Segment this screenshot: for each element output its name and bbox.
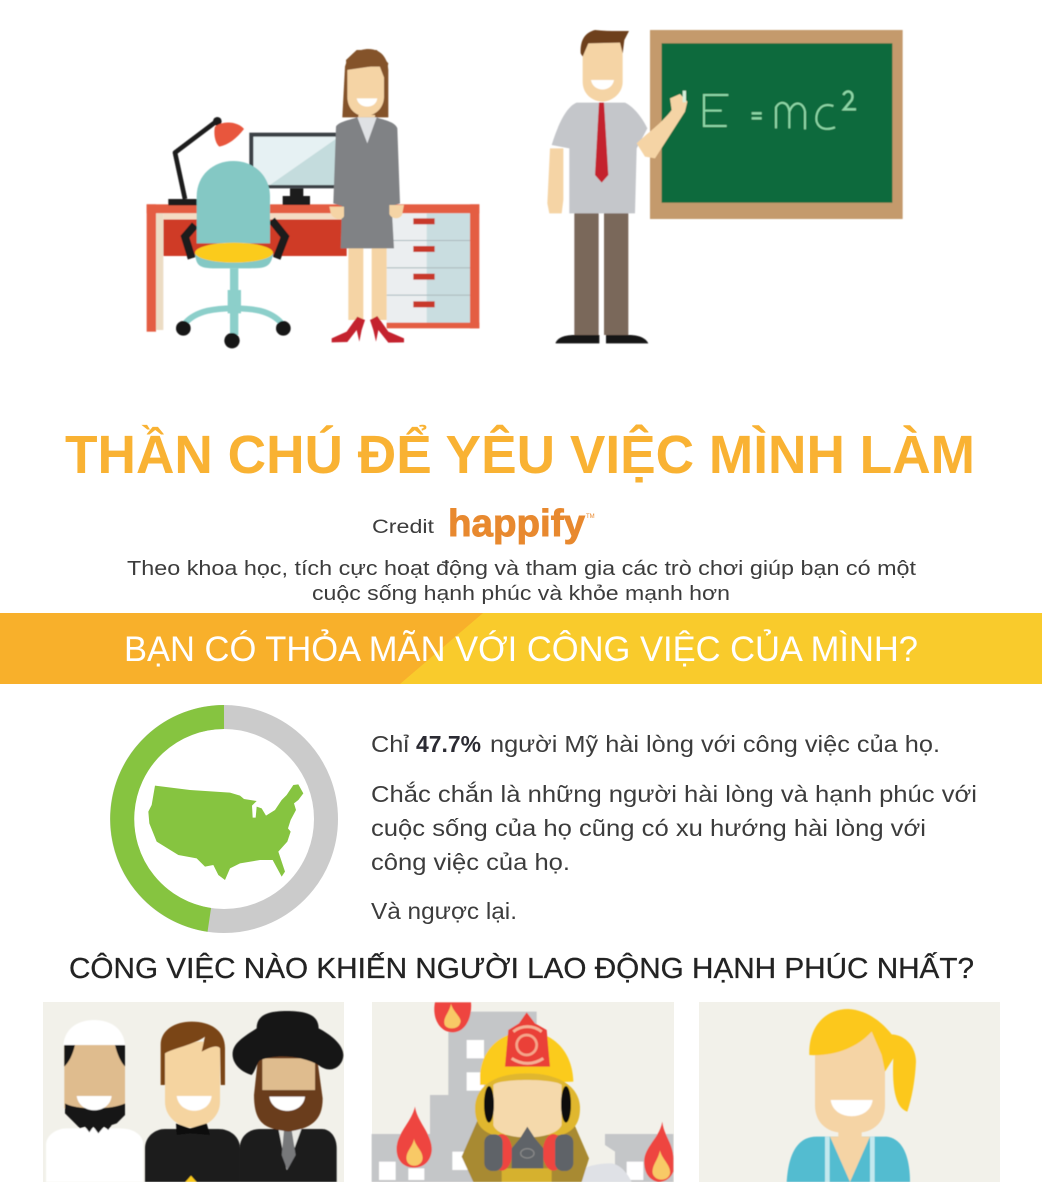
helmet badge <box>505 1012 550 1067</box>
icon: US map <box>148 784 303 880</box>
logo: happify: TM <box>586 514 595 520</box>
text block: satisfaction statistics: 47.7% <box>416 731 481 757</box>
nurse hair <box>809 1009 916 1112</box>
text block: satisfaction statistics: cuộc sống của họ cũng có xu hướng hài lòng với <box>371 815 926 841</box>
banner heading: BẠN CÓ THỎA MÃN VỚI CÔNG VIỆC CỦA MÌNH? <box>124 629 918 669</box>
desk lamp <box>168 117 244 205</box>
firefighter <box>462 1012 632 1182</box>
credit line: Credit <box>372 517 435 538</box>
gas mask <box>484 1127 573 1171</box>
banner <box>0 613 1042 684</box>
nurse body <box>787 1137 910 1182</box>
priest <box>145 1022 240 1182</box>
section heading: CÔNG VIỆC NÀO KHIẾN NGƯỜI LAO ĐỘNG HẠNH PHÚC NHẤT? <box>69 951 974 985</box>
formula <box>704 91 856 129</box>
donut chart: 47.7% with US map <box>122 717 326 921</box>
panel: nurse <box>699 1002 1000 1182</box>
burning buildings <box>430 1012 537 1182</box>
teacher <box>547 30 687 343</box>
office chair <box>176 161 291 348</box>
text block: satisfaction statistics: Và ngược lại. <box>371 898 517 924</box>
imam <box>46 1020 143 1182</box>
intro text <box>127 558 917 605</box>
text block: satisfaction statistics: Chắc chắn là những người hài lòng và hạnh phúc với <box>371 781 977 807</box>
computer monitor <box>249 133 339 205</box>
intro text: Theo khoa học, tích cực hoạt động và tham gia các trò chơi giúp bạn có một <box>127 558 917 580</box>
text block: satisfaction statistics: người Mỹ hài lòng với công việc của họ. <box>490 731 940 757</box>
flames <box>397 1002 673 1182</box>
text block: satisfaction statistics <box>371 731 977 924</box>
nurse head <box>815 1028 885 1142</box>
logo: happify: happify <box>448 503 585 545</box>
panel: firefighter <box>372 1002 674 1182</box>
text block: satisfaction statistics: công việc của họ. <box>371 849 570 875</box>
title: THẦN CHÚ ĐỂ YÊU VIỆC MÌNH LÀM <box>65 424 975 485</box>
desk <box>147 204 479 332</box>
illustration: office desk and woman <box>147 49 479 348</box>
woman <box>329 49 404 343</box>
text block: satisfaction statistics: Chỉ <box>371 731 409 757</box>
credit line <box>372 503 595 545</box>
nurse smile <box>831 1100 873 1116</box>
rabbi <box>233 1011 343 1182</box>
illustration: teacher and blackboard <box>547 30 903 343</box>
panel: clergy <box>43 1002 344 1182</box>
intro text: cuộc sống hạnh phúc và khỏe mạnh hơn <box>312 583 730 605</box>
blackboard <box>650 30 903 219</box>
